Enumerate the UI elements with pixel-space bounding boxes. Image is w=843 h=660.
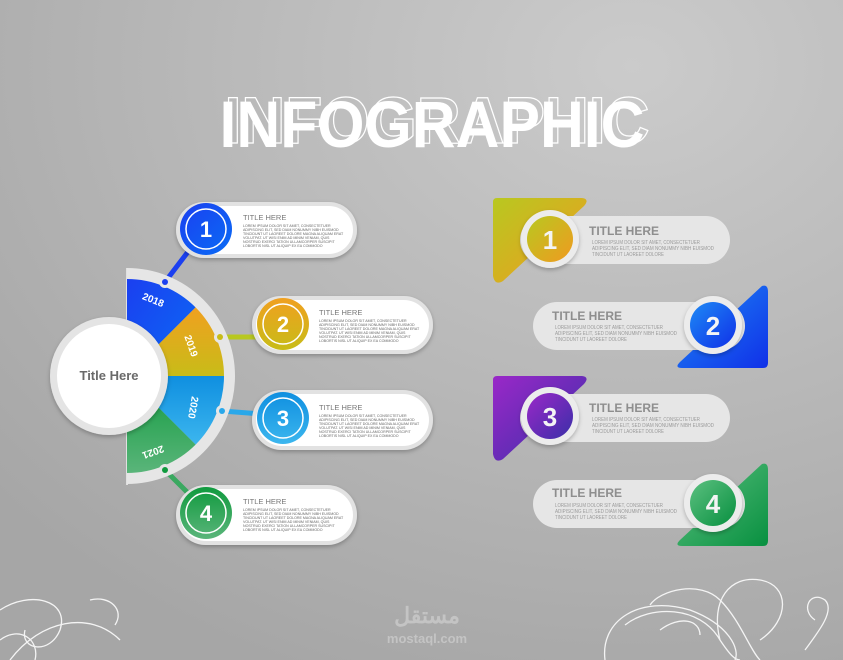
left item 2: TINCIDUNT UT LAOREET DOLORE MAGNA ALIQUAM ERAT <box>319 327 420 331</box>
left item 4: ADIPISCING ELIT, SED DIAM NONUMMY NIBH EUISMOD <box>243 512 339 516</box>
left item 4: TITLE HERE <box>243 497 286 506</box>
right item 1: TITLE HERE <box>589 224 659 238</box>
right item 4: 4 <box>706 489 721 519</box>
title: INFOGRAPHIC <box>224 83 650 157</box>
left connectors <box>165 236 262 505</box>
right item 1: ADIPISCING ELIT, SED DIAM NONUMMY NIBH EUISMOD <box>592 246 714 252</box>
left item 2: VOLUTPAT. UT WISI ENIM AD MINIM VENIAM, QUIS <box>319 331 406 335</box>
right item 3: TINCIDUNT UT LAOREET DOLORE <box>592 429 665 435</box>
left item 2: TITLE HERE <box>319 308 362 317</box>
left item 1: NOSTRUD EXERCI TATION ULLAMCORPER SUSCIPIT <box>243 240 335 244</box>
left item 1: TITLE HERE <box>243 213 286 222</box>
left item 4: LOREM IPSUM DOLOR SIT AMET, CONSECTETUER <box>243 508 331 512</box>
watermark: مستقل <box>394 603 460 628</box>
left item 3: LOBORTIS NISL UT ALIQUIP EX EA COMMODO <box>319 434 399 438</box>
right item 3: TITLE HERE <box>589 401 659 415</box>
left item 2: NOSTRUD EXERCI TATION ULLAMCORPER SUSCIPIT <box>319 335 411 339</box>
right item 2: 2 <box>706 311 720 341</box>
left item 2: ADIPISCING ELIT, SED DIAM NONUMMY NIBH EUISMOD <box>319 323 415 327</box>
left item 4: 4 <box>200 501 213 526</box>
left item 4: LOBORTIS NISL UT ALIQUIP EX EA COMMODO <box>243 528 323 532</box>
left item 3: TINCIDUNT UT LAOREET DOLORE MAGNA ALIQUAM ERAT <box>319 422 420 426</box>
left item 1: LOBORTIS NISL UT ALIQUIP EX EA COMMODO <box>243 244 323 248</box>
left item 2: LOBORTIS NISL UT ALIQUIP EX EA COMMODO <box>319 339 399 343</box>
right item 1: 1 <box>543 225 557 255</box>
right item 2: LOREM IPSUM DOLOR SIT AMET, CONSECTETUER <box>555 325 663 331</box>
left item 4: TINCIDUNT UT LAOREET DOLORE MAGNA ALIQUAM ERAT <box>243 516 344 520</box>
left item 2: LOREM IPSUM DOLOR SIT AMET, CONSECTETUER <box>319 319 407 323</box>
watermark <box>387 603 467 646</box>
right item 4 <box>533 464 768 546</box>
left item 3 <box>252 390 433 450</box>
right item 4: LOREM IPSUM DOLOR SIT AMET, CONSECTETUER <box>555 503 663 509</box>
right item 2 <box>533 286 768 368</box>
center circle: Title Here: Title Here <box>79 368 139 383</box>
left item 1 <box>176 202 357 258</box>
connector dots <box>159 276 228 476</box>
watermark: mostaql.com <box>387 631 467 646</box>
right item 1: LOREM IPSUM DOLOR SIT AMET, CONSECTETUER <box>592 240 700 246</box>
left item 4: NOSTRUD EXERCI TATION ULLAMCORPER SUSCIPIT <box>243 524 335 528</box>
left item 3: 3 <box>277 406 289 431</box>
left item 3: LOREM IPSUM DOLOR SIT AMET, CONSECTETUER <box>319 414 407 418</box>
left item 1: 1 <box>200 217 212 242</box>
right item 3: ADIPISCING ELIT, SED DIAM NONUMMY NIBH EUISMOD <box>592 423 714 429</box>
semicircle chart: 2021 <box>140 442 165 460</box>
semicircle chart: 2018 <box>141 291 166 310</box>
right item 2: TITLE HERE <box>552 309 622 323</box>
left item 2 <box>252 296 433 354</box>
left item 1: VOLUTPAT. UT WISI ENIM AD MINIM VENIAM, QUIS <box>243 236 330 240</box>
left item 4 <box>176 485 357 545</box>
left item 2: 2 <box>277 312 289 337</box>
right item 3: LOREM IPSUM DOLOR SIT AMET, CONSECTETUER <box>592 417 700 423</box>
semicircle chart: 2020 <box>185 396 200 420</box>
right item 4: ADIPISCING ELIT, SED DIAM NONUMMY NIBH EUISMOD <box>555 509 677 515</box>
center circle: Title Here <box>50 317 168 435</box>
left item 3: TITLE HERE <box>319 403 362 412</box>
left item 3: VOLUTPAT. UT WISI ENIM AD MINIM VENIAM, QUIS <box>319 426 406 430</box>
right item 2: ADIPISCING ELIT, SED DIAM NONUMMY NIBH EUISMOD <box>555 331 677 337</box>
right item 1: TINCIDUNT UT LAOREET DOLORE <box>592 252 665 258</box>
left item 1: LOREM IPSUM DOLOR SIT AMET, CONSECTETUER <box>243 224 331 228</box>
semicircle chart: 2019 <box>181 334 199 359</box>
right item 4: TINCIDUNT UT LAOREET DOLORE <box>555 515 628 521</box>
left item 4: VOLUTPAT. UT WISI ENIM AD MINIM VENIAM, QUIS <box>243 520 330 524</box>
left item 1: ADIPISCING ELIT, SED DIAM NONUMMY NIBH EUISMOD <box>243 228 339 232</box>
right item 4: TITLE HERE <box>552 486 622 500</box>
semicircle chart <box>127 268 229 485</box>
left item 3: ADIPISCING ELIT, SED DIAM NONUMMY NIBH EUISMOD <box>319 418 415 422</box>
left item 3: NOSTRUD EXERCI TATION ULLAMCORPER SUSCIPIT <box>319 430 411 434</box>
left item 1: TINCIDUNT UT LAOREET DOLORE MAGNA ALIQUAM ERAT <box>243 232 344 236</box>
right item 3: 3 <box>543 402 557 432</box>
right item 2: TINCIDUNT UT LAOREET DOLORE <box>555 337 628 343</box>
right item 3 <box>493 376 730 461</box>
decorative swirls <box>0 579 828 660</box>
right item 1 <box>493 198 730 283</box>
title: INFOGRAPHIC <box>220 87 644 161</box>
